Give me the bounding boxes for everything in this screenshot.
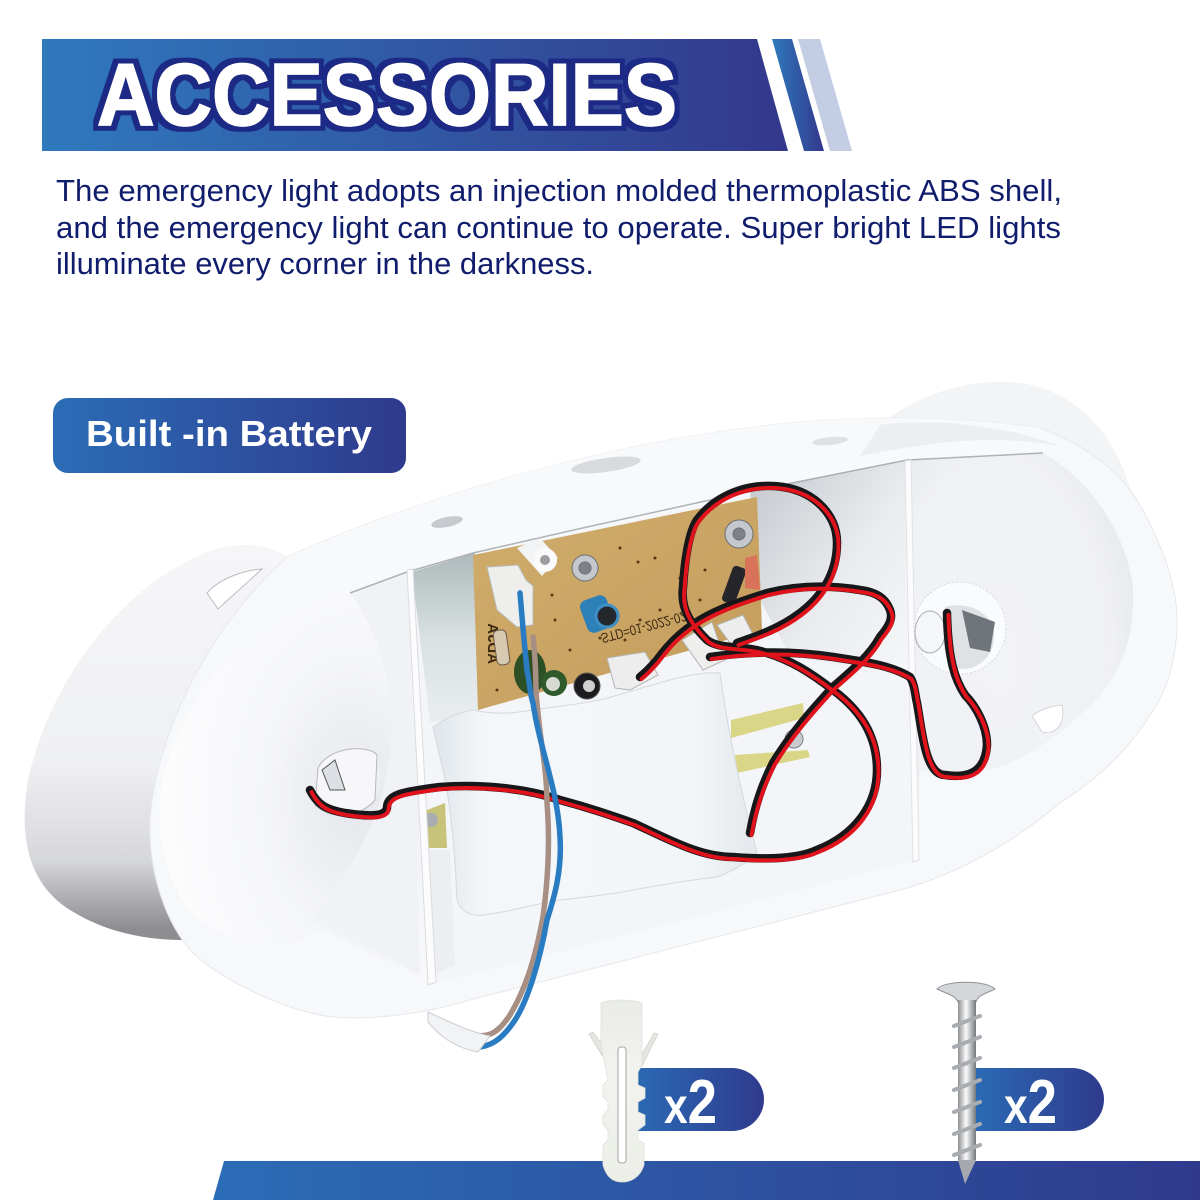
connector right — [717, 615, 756, 650]
black diode — [721, 565, 747, 605]
description text: The emergency light adopts an injection molded thermoplastic ABS shell, — [56, 173, 1062, 208]
left bowl edge — [310, 572, 420, 975]
knockout on right bowl — [1032, 705, 1063, 733]
left partition wall — [407, 569, 436, 985]
wire sleeve — [428, 1012, 490, 1052]
top rim flap — [860, 422, 1060, 456]
description text: and the emergency light can continue to operate. Super bright LED lights — [56, 210, 1061, 245]
brown and blue mains wires — [470, 593, 560, 1047]
connector bottom — [607, 652, 658, 690]
title: ACCESSORIES — [97, 45, 677, 144]
blue capacitor — [578, 593, 618, 635]
resistor — [493, 629, 510, 666]
quantity badge: wall anchors: x2 — [664, 1068, 717, 1137]
emergency light fixture photo — [25, 382, 1177, 1052]
standoff post — [517, 538, 558, 576]
description text: illuminate every corner in the darkness. — [56, 246, 594, 281]
slot in left dome — [207, 569, 262, 609]
connector mid — [682, 622, 725, 670]
lower left strip — [425, 850, 455, 975]
quantity badge: screws — [970, 1068, 1104, 1137]
red markings — [745, 555, 760, 590]
board reference mark: ADJA — [484, 623, 501, 664]
left rear dome — [25, 545, 287, 940]
screws on board — [572, 520, 753, 581]
board lettering: STD=01-2022-02 — [599, 608, 689, 647]
right partition wall — [905, 460, 919, 862]
icon: plastic wall anchor — [589, 1000, 658, 1182]
central cavity — [407, 460, 917, 985]
battery pack — [433, 673, 757, 915]
top rim band — [217, 418, 1063, 670]
housing rim — [150, 418, 1177, 1018]
yellow strips — [422, 703, 810, 848]
quantity badge: screws: x2 — [1004, 1068, 1057, 1137]
description text — [56, 173, 1062, 281]
upper right compartment — [750, 460, 906, 680]
bottom blue bar — [213, 1161, 1200, 1200]
left inner bowl — [159, 570, 430, 985]
connector left — [487, 565, 533, 627]
circuit board — [473, 497, 762, 710]
rim inner edge shadow — [350, 453, 1043, 593]
right inner bowl — [907, 453, 1133, 860]
right rear dome — [880, 382, 1131, 492]
badge: built-in battery — [53, 398, 406, 473]
upper left compartment — [412, 553, 480, 722]
icon: metal screw — [937, 982, 995, 1184]
red and black wires — [310, 486, 988, 860]
green capacitor — [514, 650, 600, 699]
holes in top rim — [430, 435, 848, 530]
right lamp socket — [914, 582, 1006, 674]
left lamp socket — [309, 742, 381, 815]
header banner — [42, 39, 852, 151]
badge: built-in battery: Built -in Battery — [86, 413, 372, 454]
quantity badge: wall anchors — [630, 1068, 764, 1137]
